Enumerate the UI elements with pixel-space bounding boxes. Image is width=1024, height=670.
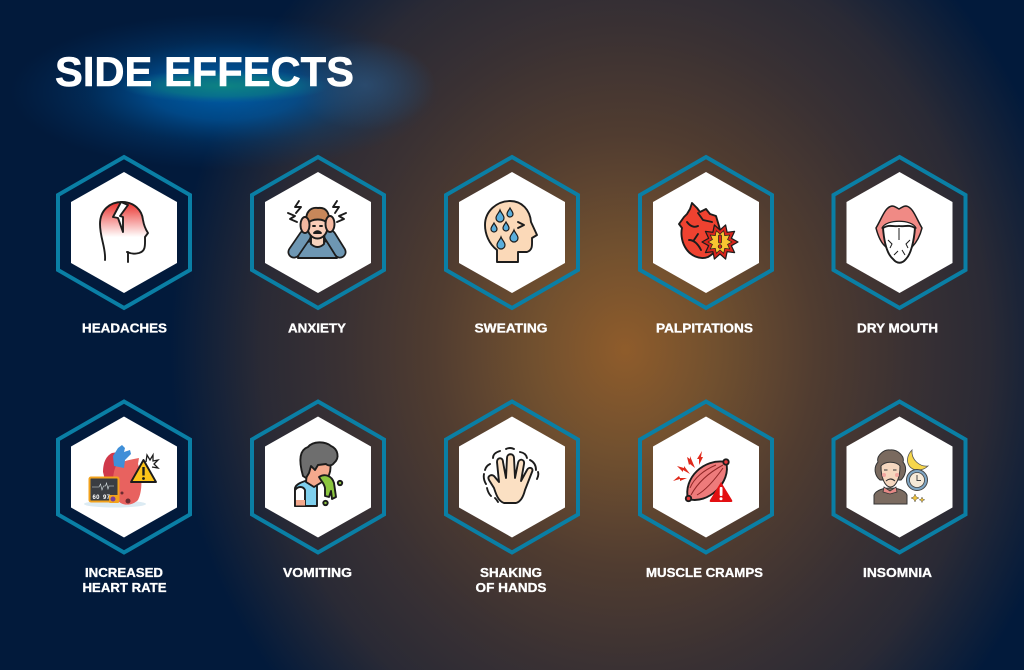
panel: headaches (58, 157, 190, 336)
panel: dry mouth (834, 157, 966, 336)
label: DRY MOUTH (857, 322, 938, 336)
hexagon frame (640, 402, 772, 552)
hexagon frame (834, 402, 966, 552)
panel: anxiety (252, 157, 384, 336)
panel: shaking of hands (446, 402, 578, 595)
label: OF HANDS (476, 581, 546, 595)
icon: heart, monitor and warning: 97 (103, 495, 111, 501)
hexagon frame (834, 157, 966, 308)
panel: palpitations (640, 157, 772, 336)
label: MUSCLE CRAMPS (646, 566, 763, 580)
icon: person vomiting (295, 442, 342, 506)
hexagon frame (252, 157, 384, 308)
label: HEADACHES (82, 322, 167, 336)
hexagon frame (58, 402, 190, 552)
title: SIDE EFFECTS (55, 48, 354, 95)
icon: dry tongue (876, 206, 922, 263)
icon: head with lightning crack (100, 202, 148, 262)
label: INCREASED (85, 566, 163, 580)
label: VOMITING (283, 566, 352, 580)
icon: anxious person (288, 201, 346, 258)
icon: heart with alert burst (679, 203, 738, 259)
panel: vomiting (252, 402, 384, 580)
label: HEART RATE (82, 581, 166, 595)
panel: insomnia (834, 402, 966, 580)
label: INSOMNIA (863, 566, 932, 580)
icon: muscle with warning (673, 451, 732, 502)
panel: sweating (446, 157, 578, 336)
label: PALPITATIONS (656, 322, 753, 336)
hexagon frame (446, 157, 578, 308)
icon: heart, monitor and warning (84, 445, 158, 508)
icon: shaking hand (484, 448, 538, 503)
icon: heart, monitor and warning: 60 (92, 495, 100, 501)
panel: increased heart rate (58, 402, 190, 595)
panel: muscle cramps (640, 402, 772, 580)
hexagon frame (252, 402, 384, 552)
icon: sweating head (485, 201, 537, 262)
label (476, 566, 546, 595)
label: SWEATING (474, 322, 548, 336)
label: ANXIETY (288, 322, 347, 336)
label: SHAKING (480, 566, 542, 580)
icon: tired person, moon and clock (874, 450, 928, 504)
hexagon frame (446, 402, 578, 552)
label (82, 566, 166, 595)
hexagon frame (640, 157, 772, 308)
hexagon frame (58, 157, 190, 308)
